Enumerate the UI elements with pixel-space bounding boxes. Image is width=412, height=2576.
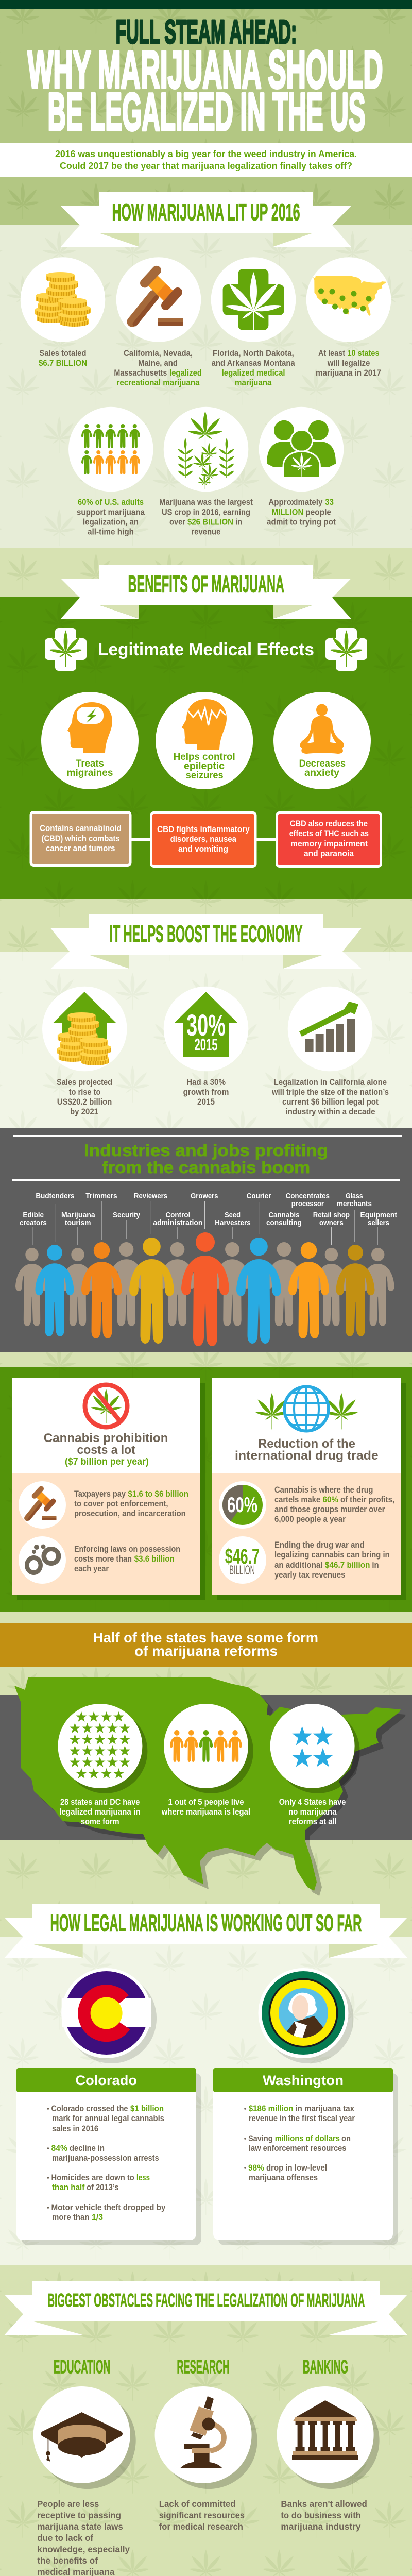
stat text: 60% of U.S. adults xyxy=(78,498,144,507)
stat text: $26 BILLION xyxy=(187,518,233,527)
icon: bar chart with arrow xyxy=(299,1002,358,1052)
intro text xyxy=(55,149,357,171)
benefit text: Treats xyxy=(76,758,104,769)
stat: only 4 states xyxy=(270,1704,360,1826)
list items: 84% xyxy=(52,2144,67,2153)
stat text: some form xyxy=(81,1817,119,1826)
item: cartels: and those groups murder over xyxy=(274,1505,385,1514)
job labels: administration xyxy=(153,1218,202,1227)
obstacle text: the benefits of xyxy=(37,2555,98,2566)
stat text: 1 out of 5 people live xyxy=(168,1798,244,1807)
box: thc effects: memory impairment xyxy=(290,839,368,849)
job labels: Glass xyxy=(346,1192,363,1200)
list items: $1 billion xyxy=(130,2104,164,2113)
benefit: seizures xyxy=(156,692,253,789)
item: tax revenue: Ending the drug war and xyxy=(274,1540,365,1550)
obstacle text: marijuana state laws xyxy=(37,2521,123,2532)
panel: industries and jobs xyxy=(12,1135,402,1346)
job labels: Concentrates xyxy=(286,1192,330,1200)
ribbon heading: how legal marijuana is working xyxy=(5,1904,407,1958)
list items: decline in xyxy=(70,2144,105,2153)
item: cartels: 60% xyxy=(322,1495,338,1504)
heading: half of the states: of marijuana reforms xyxy=(134,1643,278,1659)
box: cannabinoid: cancer and tumors xyxy=(46,844,115,853)
item: tax revenue: in xyxy=(372,1561,379,1570)
list items: mark for annual legal cannabis xyxy=(52,2114,164,2123)
stat text: legalization, an xyxy=(83,518,139,527)
item: taxpayers xyxy=(19,1481,188,1529)
icon: us map with dots xyxy=(313,276,387,316)
obstacle text: due to lack of xyxy=(37,2533,93,2543)
stat text xyxy=(267,498,336,527)
item: tax revenue: $46.7 billion xyxy=(325,1561,370,1570)
stat: sales xyxy=(21,257,105,368)
job labels: Harvesters xyxy=(215,1218,251,1227)
heading: from the cannabis boom xyxy=(102,1158,310,1177)
stat text: Sales projected xyxy=(57,1078,112,1087)
stat text xyxy=(183,1078,229,1107)
stat text: 33 xyxy=(325,498,334,507)
stat text: US$20.2 billion xyxy=(57,1097,112,1107)
icon: right cross xyxy=(325,628,367,671)
benefit text: migraines xyxy=(67,768,113,778)
job labels: Security xyxy=(113,1211,141,1219)
item: tax revenue: an additional xyxy=(274,1561,322,1570)
box: cannabinoid xyxy=(31,812,130,866)
stat text: Had a 30% xyxy=(186,1078,226,1087)
stat text: in xyxy=(236,518,242,527)
ribbon heading: it helps boost the economy xyxy=(50,914,362,969)
benefit text: Decreases xyxy=(299,758,346,769)
stat text: and Arkansas Montana xyxy=(212,359,295,368)
stat text: legalized xyxy=(169,368,202,378)
list items: drop in low-level xyxy=(266,2163,327,2173)
job labels: Seed xyxy=(225,1211,241,1219)
icon: plants xyxy=(177,411,235,489)
stat text xyxy=(59,1798,140,1826)
benefit text xyxy=(299,758,346,778)
panel: cannabis prohibition xyxy=(12,1378,205,1600)
card: washington xyxy=(213,2068,398,2245)
icon: ten people xyxy=(81,424,140,474)
list items: law enforcement resources xyxy=(249,2144,346,2153)
stat: ten states xyxy=(306,257,391,378)
icon: left cross xyxy=(45,628,87,671)
stat text: industry within a decade xyxy=(286,1107,375,1116)
obstacle: education xyxy=(33,2357,136,2576)
stat text: Approximately xyxy=(268,498,323,507)
icon: microscope xyxy=(180,2396,224,2468)
list items: Homicides are down to xyxy=(52,2173,134,2182)
obstacle text: knowledge, especially xyxy=(37,2544,130,2554)
benefit text: anxiety xyxy=(304,768,339,778)
stat: people tried pot xyxy=(259,407,344,527)
flag badge: colorado xyxy=(61,1968,157,2063)
icon: head with wave xyxy=(182,699,227,750)
stat text: MILLION xyxy=(272,508,303,517)
list items: in marijuana tax xyxy=(296,2104,355,2113)
job labels: Cannabis xyxy=(268,1211,300,1219)
stat text: marijuana xyxy=(235,378,272,387)
item: taxpayers: to cover pot enforcement, xyxy=(74,1499,168,1509)
benefit: anxiety xyxy=(273,692,371,789)
job labels: creators xyxy=(20,1218,47,1227)
stat text: revenue xyxy=(191,528,220,537)
list items: millions of dollars xyxy=(275,2134,340,2143)
item: cartels: of their profits, xyxy=(340,1495,394,1504)
icon: green cross with leaf xyxy=(223,269,284,335)
intro text: 2016 was unquestionably a big year for the weed industry in America. xyxy=(55,149,357,159)
stat text: California, Nevada, xyxy=(124,349,193,358)
benefit text: Helps control xyxy=(174,752,235,762)
icon: arrow and coins xyxy=(54,992,116,1065)
heading: half of the states xyxy=(93,1630,318,1659)
obstacle text: Banks aren't allowed xyxy=(281,2499,367,2509)
obstacle text: receptive to passing xyxy=(37,2510,121,2520)
item: tax revenue: yearly tax revenues xyxy=(274,1570,345,1580)
obstacle text: significant resources xyxy=(159,2510,245,2520)
box: inflammatory xyxy=(151,813,255,867)
stat text xyxy=(39,349,87,368)
stat text: Legalization in California alone xyxy=(274,1078,387,1087)
stat text: legalized marijuana in xyxy=(59,1807,140,1817)
item: enforcing laws: Enforcing laws on possession xyxy=(74,1545,180,1554)
list items: marijuana offenses xyxy=(249,2173,318,2182)
obstacle text xyxy=(37,2499,130,2576)
benefit: migraines xyxy=(41,692,139,789)
icon: prohibited leaf xyxy=(85,1385,127,1427)
icon: three people with leaf xyxy=(267,420,336,478)
icon: meditating figure xyxy=(300,704,344,754)
stat text: where marijuana is legal xyxy=(161,1807,250,1817)
stat: adults support xyxy=(68,407,153,537)
heading: Reduction of the xyxy=(258,1437,355,1451)
card: colorado xyxy=(16,2068,201,2245)
obstacle: banking xyxy=(277,2357,380,2532)
item: tax revenue: BILLION xyxy=(229,1563,255,1578)
heading: international drug trade xyxy=(235,1449,379,1463)
card: washington: Washington xyxy=(263,2073,344,2088)
obstacle text: marijuana industry xyxy=(281,2521,361,2532)
intro text: Could 2017 be the year that marijuana legalization finally takes off? xyxy=(60,161,352,171)
heading: Industries and jobs profiting xyxy=(84,1141,328,1160)
stat text: over xyxy=(169,518,186,527)
job labels: tourism xyxy=(65,1218,91,1227)
heading: ($7 billion per year) xyxy=(65,1456,149,1467)
obstacle text: People are less xyxy=(37,2499,99,2509)
heading xyxy=(44,1431,168,1467)
list items: less xyxy=(136,2173,150,2182)
heading: legitimate medical effects: Legitimate Medical Effects xyxy=(98,640,314,659)
icon: graduation cap xyxy=(41,2412,123,2462)
heading: legitimate medical effects xyxy=(45,628,367,671)
list items xyxy=(244,2104,355,2182)
stat text xyxy=(159,498,253,537)
list items: 1/3 xyxy=(92,2213,103,2222)
ribbon heading: benefits of marijuana xyxy=(61,565,351,619)
state: colorado xyxy=(16,1968,201,2245)
obstacle text xyxy=(281,2499,367,2532)
job labels: consulting xyxy=(266,1218,302,1227)
box: thc effects: effects of THC such as xyxy=(289,829,369,838)
item: tax revenue xyxy=(219,1536,390,1584)
job labels: Growers xyxy=(191,1192,218,1200)
stat text: will triple the size of the nation’s xyxy=(271,1088,389,1097)
stat text xyxy=(271,1078,389,1116)
stat text: Florida, North Dakota, xyxy=(213,349,294,358)
obstacle: education: EDUCATION xyxy=(54,2357,110,2378)
list items: Colorado crossed the xyxy=(52,2104,128,2113)
stat text: by 2021 xyxy=(70,1107,98,1116)
job labels: owners xyxy=(319,1218,344,1227)
cbd flow boxes xyxy=(31,812,381,867)
flag badge: washington xyxy=(259,1968,353,2063)
stat text: Only 4 States have xyxy=(279,1798,346,1807)
benefit text: seizures xyxy=(186,770,224,781)
box: inflammatory: disorders, nausea xyxy=(170,835,237,844)
icon: four stars xyxy=(292,1726,333,1767)
item: cartels: 60% xyxy=(227,1493,258,1517)
item: enforcing laws: costs more than xyxy=(74,1554,132,1564)
list items: more than xyxy=(52,2213,90,2222)
job labels: Courier xyxy=(247,1192,271,1200)
obstacle text: to do business with xyxy=(281,2510,361,2520)
ribbon heading: biggest obstacles xyxy=(5,2281,407,2335)
job labels: Retail shop xyxy=(313,1211,350,1219)
job labels: Reviewers xyxy=(134,1192,167,1200)
stat text: Maine, and xyxy=(138,359,178,368)
obstacle: banking: BANKING xyxy=(303,2357,348,2378)
job labels: Trimmers xyxy=(85,1192,117,1200)
heading xyxy=(84,1141,328,1177)
stat text: $6.7 BILLION xyxy=(39,359,87,368)
stat text: support marijuana xyxy=(77,508,145,517)
stat: medical xyxy=(211,257,296,387)
box: inflammatory: and vomiting xyxy=(178,844,228,854)
item: tax revenue: $46.7 xyxy=(225,1544,260,1568)
box: inflammatory: CBD fights inflammatory xyxy=(157,825,250,834)
stat text: no marijuana xyxy=(288,1807,337,1817)
stat text xyxy=(212,349,295,387)
stat: recreational xyxy=(114,257,202,387)
stat text: 28 states and DC have xyxy=(60,1798,140,1807)
icon: arrow with 30%: 30% xyxy=(186,1009,226,1042)
item: cartels: cartels make xyxy=(274,1495,320,1504)
obstacle text: for medical research xyxy=(159,2521,243,2532)
list items xyxy=(47,2104,166,2222)
job labels: merchants xyxy=(337,1199,372,1208)
stat text: At least xyxy=(318,349,345,358)
icon: five people xyxy=(170,1730,242,1762)
list items: revenue in the first fiscal year xyxy=(249,2114,355,2123)
icon: arrow with 30% xyxy=(175,992,237,1057)
heading xyxy=(235,1437,379,1463)
stat: california xyxy=(271,987,389,1116)
stat text xyxy=(316,349,381,378)
job labels: Budtenders xyxy=(36,1192,74,1200)
stat text xyxy=(114,349,202,387)
job labels: sellers xyxy=(368,1218,389,1227)
item: tax revenue: legalizing cannabis can bring in xyxy=(274,1550,390,1560)
list items: Saving xyxy=(248,2134,273,2143)
list items: of 2013’s xyxy=(87,2183,119,2192)
stat text: US crop in 2016, earning xyxy=(162,508,250,517)
list items: than half xyxy=(52,2183,85,2192)
icon: globe and leaves xyxy=(255,1383,358,1435)
heading: Cannabis prohibition xyxy=(44,1431,168,1445)
stat text: growth from xyxy=(183,1088,229,1097)
job labels xyxy=(20,1192,397,1227)
item: taxpayers: prosecution, and incarceration xyxy=(74,1509,186,1518)
stat: 28 states xyxy=(58,1704,147,1826)
stat text: people xyxy=(305,508,331,517)
stat text: to rise to xyxy=(69,1088,100,1097)
ribbon heading: how marijuana lit up 2016 xyxy=(61,192,351,247)
stat text: admit to trying pot xyxy=(267,518,336,527)
stat text: 10 states xyxy=(347,349,379,358)
stat text: all-time high xyxy=(88,528,134,537)
stat: 1 out of 5 xyxy=(161,1704,253,1817)
list items: sales in 2016 xyxy=(52,2124,98,2133)
stat text xyxy=(57,1078,112,1116)
box: thc effects: CBD also reduces the xyxy=(290,819,368,828)
heading: half of the states: Half of the states have some form xyxy=(93,1630,318,1646)
box: thc effects: and paranoia xyxy=(304,849,354,858)
job labels: processor xyxy=(291,1199,324,1208)
stat text: legalized medical xyxy=(222,368,285,378)
item: enforcing laws: $3.6 billion xyxy=(134,1554,175,1564)
item: taxpayers: $1.6 to $6 billion xyxy=(128,1489,188,1499)
list items: marijuana-possession arrests xyxy=(52,2154,159,2163)
item: enforcing laws xyxy=(19,1536,180,1584)
heading: costs a lot xyxy=(77,1443,135,1457)
stat text: Marijuana was the largest xyxy=(159,498,253,507)
panel: international drug trade xyxy=(212,1378,406,1600)
people crowd xyxy=(15,1232,394,1346)
list items: $186 million xyxy=(249,2104,293,2113)
job labels: Edible xyxy=(23,1211,44,1219)
title xyxy=(28,13,383,141)
benefit text xyxy=(174,752,235,781)
job labels: Marijuana xyxy=(61,1211,95,1219)
job labels: Control xyxy=(165,1211,190,1219)
list items: Motor vehicle theft dropped by xyxy=(52,2203,166,2212)
icon: gavel xyxy=(130,270,183,326)
us map panel xyxy=(14,1677,406,1896)
box: cannabinoid: (CBD) which combats xyxy=(42,834,120,843)
icon: stars xyxy=(70,1711,130,1778)
icon: bank xyxy=(292,2400,358,2460)
item: enforcing laws: each year xyxy=(74,1564,109,1573)
item: cartels: Cannabis is where the drug xyxy=(274,1485,373,1495)
stat: thirty percent growth xyxy=(164,987,248,1107)
stat text: Sales totaled xyxy=(39,349,87,358)
stat text: Massachusetts xyxy=(114,368,167,378)
stat text: recreational marijuana xyxy=(116,378,200,387)
stat text: marijuana in 2017 xyxy=(316,368,381,378)
stat text xyxy=(77,498,145,537)
box: cannabinoid: Contains cannabinoid xyxy=(40,824,122,833)
job labels: Equipment xyxy=(360,1211,397,1219)
icon: head with bolt xyxy=(67,702,112,753)
item: taxpayers: Taxpayers pay xyxy=(74,1489,126,1499)
stat text: will legalize xyxy=(327,359,370,368)
icon: arrow with 30%: 2015 xyxy=(195,1035,217,1054)
box: thc effects xyxy=(277,813,381,867)
stat text xyxy=(279,1798,346,1826)
stat text: reforms at all xyxy=(289,1817,337,1826)
benefit text: epileptic xyxy=(184,761,225,772)
stat text: current $6 billion legal pot xyxy=(282,1097,379,1107)
stat text: 2015 xyxy=(197,1097,215,1107)
card: colorado: Colorado xyxy=(75,2073,137,2088)
state: washington xyxy=(213,1968,398,2245)
item: cartels: 6,000 people a year xyxy=(274,1515,346,1524)
stat text xyxy=(161,1798,250,1817)
item: cartels xyxy=(219,1481,394,1529)
obstacle: research: RESEARCH xyxy=(177,2357,229,2378)
stat: largest crop xyxy=(159,407,253,537)
stat: sales projected xyxy=(42,987,127,1116)
list items: 98% xyxy=(248,2163,264,2173)
obstacle text: Lack of committed xyxy=(159,2499,236,2509)
obstacle: research xyxy=(155,2357,258,2532)
obstacle text xyxy=(159,2499,245,2532)
icon: coins xyxy=(35,272,91,327)
list items: on xyxy=(341,2134,351,2143)
benefit text xyxy=(67,758,113,778)
